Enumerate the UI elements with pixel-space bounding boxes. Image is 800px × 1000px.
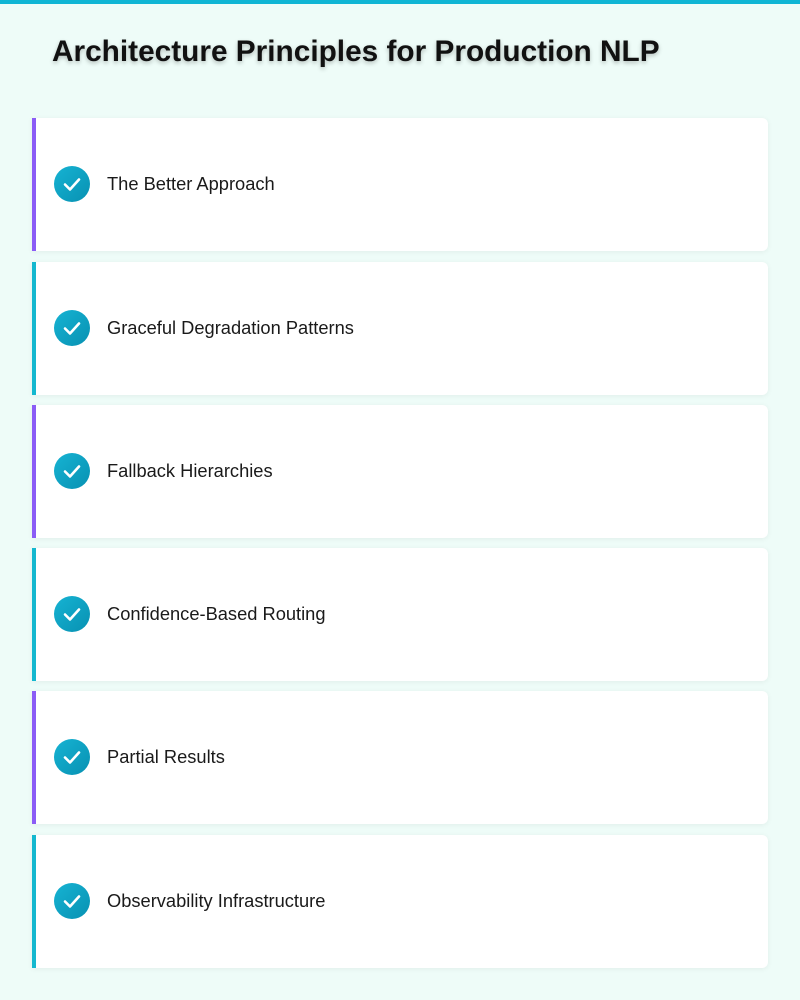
- label: Fallback Hierarchies: [107, 460, 273, 481]
- label: Confidence-Based Routing: [107, 603, 326, 624]
- card: Confidence-Based Routing: [32, 548, 768, 681]
- label: The Better Approach: [107, 173, 275, 194]
- card: Graceful Degradation Patterns: [32, 262, 768, 395]
- icon: check: [54, 453, 90, 489]
- title: Architecture Principles for Production NLP: [52, 35, 660, 68]
- card: Partial Results: [32, 691, 768, 824]
- card: The Better Approach: [32, 118, 768, 251]
- label: Partial Results: [107, 746, 225, 767]
- icon: check: [54, 883, 90, 919]
- label: Graceful Degradation Patterns: [107, 317, 354, 338]
- label: Observability Infrastructure: [107, 890, 325, 911]
- icon: check: [54, 166, 90, 202]
- card: Fallback Hierarchies: [32, 405, 768, 538]
- icon: check: [54, 739, 90, 775]
- card: Observability Infrastructure: [32, 835, 768, 968]
- icon: check: [54, 596, 90, 632]
- icon: check: [54, 310, 90, 346]
